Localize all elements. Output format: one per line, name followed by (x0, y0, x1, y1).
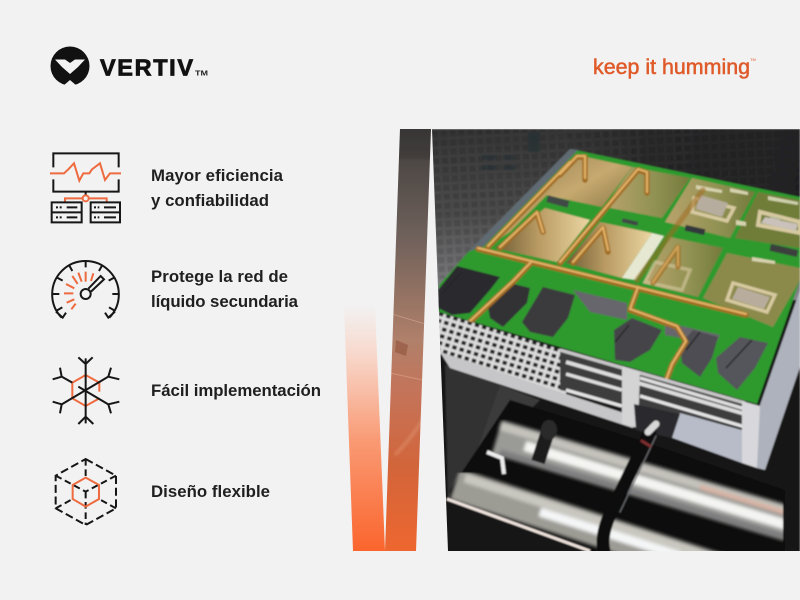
wordmark: VERTIV (100, 54, 193, 80)
lower chrome pipe (455, 478, 720, 570)
lower dark area with pipes (438, 299, 800, 551)
front panel: slotted bars (560, 290, 800, 470)
text: Fácil implementación: Fácil implementación (151, 381, 321, 400)
logo: Vertiv (50, 46, 208, 86)
icon: Vertiv emblem (50, 46, 90, 86)
photo background wall (425, 129, 800, 309)
upper chrome pipe (497, 426, 790, 538)
text: Mayor eficiencia y confiabilidad: y confiabilidad (151, 191, 269, 210)
icon: snowflake with hexagon (53, 357, 119, 424)
trademark: TM (195, 70, 208, 78)
front panel: perforated section (438, 312, 566, 402)
icon: gauge (52, 261, 119, 318)
text: Protege la red de líquido secundaria (151, 267, 299, 311)
front panel: silver base (440, 352, 633, 428)
icon: dashed hexagonal cube (56, 459, 116, 525)
text: Diseño flexible: Diseño flexible (151, 482, 270, 501)
dark power blocks (438, 266, 768, 390)
accent strip: photo tinted orange (385, 129, 431, 551)
cold plates (488, 155, 800, 327)
chip pad contacts (696, 185, 798, 264)
circuit board (439, 150, 800, 404)
text: Mayor eficiencia y confiabilidad (151, 166, 284, 210)
text: Protege la red de líquido secundaria: líquido secundaria (151, 292, 299, 311)
chip pads (645, 198, 800, 312)
black coolant cable (603, 424, 656, 551)
cooling pipes (470, 156, 746, 397)
text: Protege la red de líquido secundaria: Protege la red de (151, 267, 288, 286)
tagline: keep it humming: keep it humming (593, 56, 750, 79)
icon: monitor with servers (50, 153, 121, 222)
accent strip: orange fade (344, 305, 385, 551)
pipe clamp (538, 425, 550, 462)
photo: liquid-cooled server tray (425, 129, 800, 570)
tagline: keep it humming: TM (750, 57, 756, 62)
text: Mayor eficiencia y confiabilidad: Mayor eficiencia (151, 166, 284, 185)
